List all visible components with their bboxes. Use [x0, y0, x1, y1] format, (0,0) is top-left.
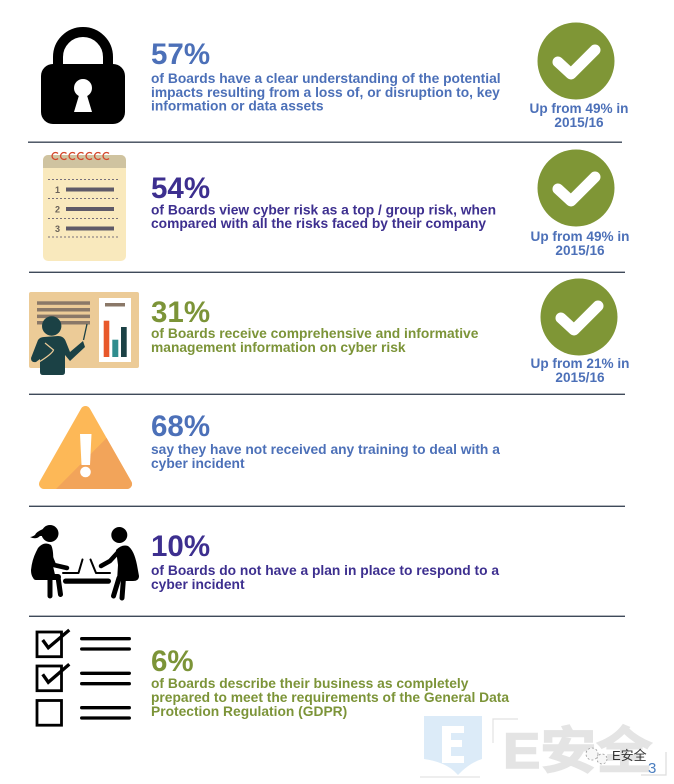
stat: 54%: of Boards view cyber risk as a top / group risk, when [151, 202, 496, 218]
stat: 57%: of Boards have a clear understanding of the potential [151, 71, 501, 86]
stat: 68%: 68% [151, 410, 210, 443]
stat: 54%: 54% [151, 172, 210, 205]
stat: 68%: say they have not received any training to deal with a [151, 442, 500, 457]
stat: 54% [151, 172, 496, 231]
stat: 6%: of Boards describe their business as completely [151, 676, 469, 691]
badge: up from 49% (second): 2015/16 [555, 243, 605, 258]
stat: 31%: 31% [151, 296, 210, 329]
stat: 68%: cyber incident [151, 456, 245, 471]
badge: up from 49% (first): Up from 49% in [530, 101, 628, 116]
icon: two people with laptops [30, 525, 139, 598]
icon: numbered notepad [43, 152, 126, 261]
stat: 31%: management information on cyber risk [151, 340, 406, 355]
stat: 31%: of Boards receive comprehensive and informative [151, 326, 479, 341]
stat: 31% [151, 296, 479, 355]
stat: 6% [151, 645, 509, 719]
icon: numbered notepad: 3 [55, 224, 60, 234]
watermark logo [420, 716, 666, 779]
icon: numbered notepad: 1 [55, 185, 60, 195]
stat: 6%: Protection Regulation (GDPR) [151, 704, 347, 719]
stat: 57% [151, 38, 501, 114]
icon: presenter at board [29, 292, 139, 375]
badge: up from 49% (first): 2015/16 [554, 115, 604, 130]
badge: up from 49% (second) [531, 150, 629, 258]
stat: 57%: impacts resulting from a loss of, or disruption to, key [151, 85, 500, 100]
icon: padlock [41, 32, 125, 124]
stat: 10%: 10% [151, 530, 210, 563]
watermark logo: E安全 [503, 724, 652, 779]
stat: 10%: cyber incident [151, 577, 245, 592]
stat: 6%: prepared to meet the requirements of the General Data [151, 690, 509, 705]
stat: 10%: of Boards do not have a plan in place to respond to a [151, 563, 499, 578]
watermark logo: E安全 [612, 748, 647, 763]
watermark logo: 3 [648, 760, 656, 777]
icon: numbered notepad: 2 [55, 204, 60, 214]
icon: warning triangle [44, 411, 132, 489]
stat: 6%: 6% [151, 645, 194, 678]
stat: 10% [151, 530, 499, 592]
badge: up from 21%: Up from 21% in [531, 356, 629, 371]
icon: checklist [37, 630, 129, 725]
stat: 57%: information or data assets [151, 98, 324, 114]
badge: up from 21%: 2015/16 [555, 370, 605, 385]
stat: 54%: compared with all the risks faced by their company [151, 216, 486, 231]
badge: up from 49% (second): Up from 49% in [531, 229, 629, 244]
badge: up from 21% [531, 278, 629, 385]
stat: 68% [151, 410, 500, 471]
badge: up from 49% (first) [530, 22, 628, 130]
stat: 57%: 57% [151, 38, 210, 71]
